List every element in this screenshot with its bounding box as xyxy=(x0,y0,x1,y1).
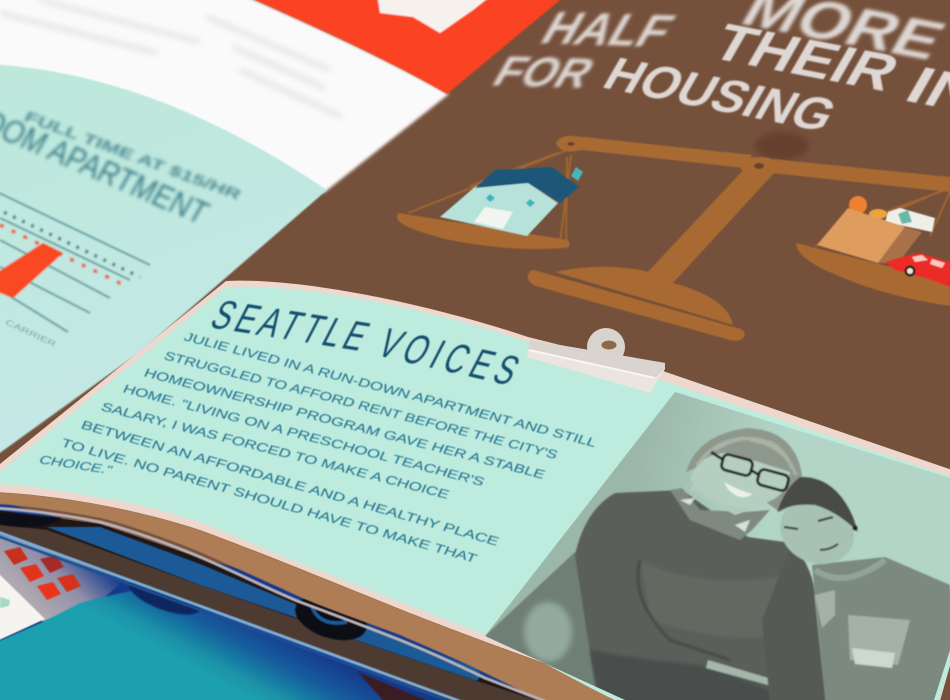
story text: CHOICE." xyxy=(37,453,115,477)
inner blue page xyxy=(47,527,481,681)
woman sleeve crease xyxy=(638,560,730,660)
girl eyes and mouth xyxy=(784,517,838,550)
illustration: balance scale xyxy=(397,132,950,341)
gray paper sheet xyxy=(0,533,130,622)
story text: JULIE LIVED IN A RUN-DOWN APARTMENT AND STILL xyxy=(182,330,599,450)
teal sheet xyxy=(0,590,470,700)
icon: red car xyxy=(885,253,950,287)
panel: white page top left xyxy=(0,0,449,192)
shadow blob above pivot xyxy=(755,132,809,160)
smile xyxy=(724,482,752,497)
woman face xyxy=(690,453,790,507)
white sheet corner xyxy=(0,570,45,642)
icon: grocery bag xyxy=(817,196,935,263)
chart heading: FULL TIME AT $15/HR xyxy=(21,109,244,203)
black gap under cover xyxy=(0,510,575,700)
scale strings left xyxy=(408,150,571,245)
headline: for housing: FOR xyxy=(485,48,603,97)
neck xyxy=(691,485,744,516)
tab: paper clip xyxy=(527,328,665,393)
heading: seattle voices: SEATTLE xyxy=(204,291,381,360)
headline: for housing xyxy=(485,0,950,141)
story text: BETWEEN AN AFFORDABLE AND A HEALTHY PLACE xyxy=(79,418,501,548)
headline: for housing: HALF xyxy=(532,3,683,57)
collar xyxy=(670,488,770,540)
column xyxy=(644,165,775,284)
panel mint fill xyxy=(0,287,950,700)
heading: seattle voices: VOICES xyxy=(371,319,533,395)
left beam xyxy=(556,136,752,168)
paper in lap xyxy=(706,660,775,686)
scarf xyxy=(766,498,788,512)
panel: seattle voices xyxy=(0,281,950,700)
right pan xyxy=(796,243,950,306)
woman arm over girl xyxy=(762,558,826,700)
base plate xyxy=(528,270,745,341)
dark circular shape xyxy=(290,588,372,648)
hair highlights xyxy=(697,438,796,475)
icon: house xyxy=(440,167,583,236)
story text: SALARY, I WAS FORCED TO MAKE A CHOICE xyxy=(99,400,452,501)
light blue page edge xyxy=(0,531,470,700)
left pan xyxy=(397,213,570,249)
couch xyxy=(485,552,596,686)
dark red corner xyxy=(358,672,440,700)
story text xyxy=(37,330,599,566)
panel pink border xyxy=(0,281,950,700)
red squares grid xyxy=(0,547,81,608)
woman lap shadow xyxy=(590,650,780,700)
headline: for housing: HOUSING xyxy=(595,48,846,141)
story text: HOME. "LIVING ON A PRESCHOOL TEACHER'S xyxy=(121,382,487,489)
girl shirt xyxy=(812,557,950,700)
base dome xyxy=(555,267,733,325)
scale strings right xyxy=(815,187,950,246)
lower layers: dark blue backdrop xyxy=(0,500,660,700)
earring xyxy=(852,526,858,530)
headline: for housing: THEIR xyxy=(702,13,910,102)
chart axis label: CARRIER xyxy=(4,318,58,349)
panel: mint chart page xyxy=(0,64,327,460)
seattle voices cover edge xyxy=(0,492,655,700)
heading: seattle voices xyxy=(204,291,533,395)
pivot xyxy=(740,157,778,175)
photo: woman and girl xyxy=(480,385,950,700)
shirt graphic xyxy=(815,590,910,665)
bar chart xyxy=(0,191,150,332)
panel: red banner xyxy=(233,0,572,94)
woman sweater xyxy=(574,490,790,692)
story text: TO LIVE. NO PARENT SHOULD HAVE TO MAKE THAT xyxy=(59,436,480,566)
dark shadow under the pages xyxy=(125,570,205,622)
black arc upper left xyxy=(0,512,62,527)
story text: STRUGGLED TO AFFORD RENT BEFORE THE CITY'S xyxy=(162,349,560,462)
glasses xyxy=(711,452,790,492)
brochure back strip xyxy=(0,524,560,700)
right beam xyxy=(772,159,950,192)
girl hair xyxy=(777,477,858,532)
story text: HOMEOWNERSHIP PROGRAM GAVE HER A STABLE xyxy=(142,366,547,482)
girl shirt neckline xyxy=(815,560,885,578)
girl face xyxy=(780,504,855,564)
icon: white map shape xyxy=(377,0,492,33)
hair back xyxy=(686,428,802,485)
